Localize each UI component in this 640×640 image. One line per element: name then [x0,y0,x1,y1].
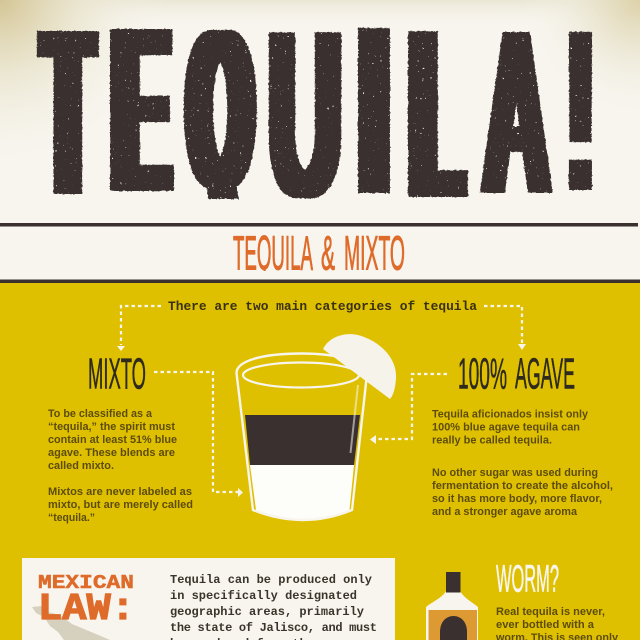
law text: the state of Jalisco, and must [170,621,377,635]
arrow: intro to agave [484,306,526,350]
heading: mexican: MEXICAN [38,572,134,594]
text block: mixto: To be classified as a [48,408,153,420]
text: MIXTO [344,228,405,280]
text block: worm: Real tequila is never, [496,606,605,618]
text block: worm: ever bottled with a [496,619,595,631]
law text: in specifically designated [170,589,357,603]
text block: mixto: Mixtos are never labeled as [48,486,192,498]
white liquid layer [250,465,354,519]
glass outline [236,354,367,520]
panel: mexican law [22,558,395,640]
text block: mixto: “tequila,” the spirit must [48,421,175,433]
law text: Tequila can be produced only [170,573,372,587]
section heading: & [321,228,335,280]
text block: mixto: mixto, but are merely called [48,499,193,511]
text block: agave: fermentation to create the alcohol, [432,480,613,492]
arrow: agave to glass [370,374,447,444]
text block: agave: No other sugar was used during [432,467,598,479]
icon: map of mexico [32,606,110,640]
paper background [0,0,640,284]
text block: agave [432,408,613,518]
text block: agave: so it has more body, more flavor, [432,493,602,505]
arrow: intro to mixto [117,306,161,351]
text: WORM? [496,558,559,600]
text block: mixto: “tequila.” [48,512,95,524]
text block: worm [495,606,619,640]
arrow: mixto to glass [154,372,243,497]
text block: mixto: agave. These blends are [48,447,175,459]
text block: mixto [48,408,193,524]
text block: mixto: called mixto. [48,460,114,472]
dark liquid layer [245,415,360,465]
law text [170,573,377,640]
section rule: top [0,223,638,226]
title [36,27,593,200]
text block: agave: Tequila aficionados insist only [432,408,589,420]
text block: agave: really be called tequila. [432,434,552,446]
text block: agave: and a stronger agave aroma [432,506,578,518]
text: MIXTO [88,350,146,398]
text block: agave: 100% blue agave tequila can [432,422,580,434]
section heading [233,235,404,271]
yellow panel [0,280,640,640]
glass highlight [350,385,358,453]
intro line: There are two main categories of tequila [168,299,477,314]
section heading: TEQUILA [233,228,313,280]
heading: law: LAW: [38,588,135,631]
text block: mixto: contain at least 51% blue [48,434,177,446]
icon: tequila bottle [426,572,478,640]
glass rim [243,362,359,388]
icon: shot glass with lime [236,334,396,520]
law text: geographic areas, primarily [170,605,364,619]
lime wedge [323,334,396,399]
heading: 100% agave: 100% [458,350,507,398]
